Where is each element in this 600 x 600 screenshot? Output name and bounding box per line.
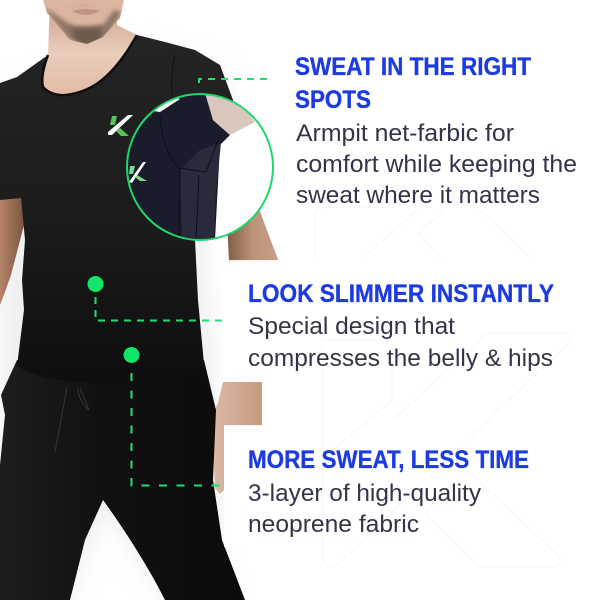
neck skin	[42, 0, 137, 95]
text: armpit description: Armpit net-farbic for	[296, 120, 514, 147]
black pants	[0, 360, 245, 600]
connector: armpit detail	[199, 79, 268, 83]
text: slimmer description: Special design that	[248, 313, 455, 340]
drawstring	[55, 387, 89, 452]
marker dot: belly	[88, 276, 104, 292]
model figure	[0, 0, 279, 600]
face	[43, 0, 124, 46]
text: fabric description	[248, 480, 481, 538]
right arm	[226, 200, 279, 262]
panel: more sweat backing	[224, 425, 600, 547]
background soft shadow	[0, 45, 235, 600]
marker dot: waist	[124, 347, 140, 363]
panel: look slimmer backing	[224, 260, 600, 382]
connector: belly	[96, 297, 224, 320]
text: slimmer description	[248, 313, 553, 372]
watermark K logo	[315, 207, 570, 567]
dark sleeve and torso	[128, 95, 230, 238]
heading: sweat in the right spots	[295, 53, 531, 114]
white strip	[154, 98, 180, 112]
text: armpit description: comfort while keeping the	[296, 151, 577, 178]
text: armpit description	[296, 120, 577, 209]
mesh panel	[180, 143, 221, 240]
heading: more sweat less time: MORE SWEAT, LESS TIME	[248, 446, 529, 474]
text: slimmer description: compresses the belly & hips	[248, 345, 553, 372]
heading: look slimmer instantly: LOOK SLIMMER INSTANTLY	[248, 280, 554, 308]
logo K in lens	[129, 162, 147, 183]
bare arm	[205, 93, 255, 135]
text: armpit description: sweat where it matters	[296, 182, 540, 209]
armpit zoom circle	[120, 90, 273, 245]
forearm and hand	[202, 382, 262, 494]
black shirt	[0, 35, 235, 383]
left arm	[0, 198, 24, 305]
connector: waist	[132, 373, 224, 486]
shirt collar	[42, 35, 137, 95]
text: fabric description: neoprene fabric	[248, 511, 419, 538]
heading: sweat in the right spots: SPOTS	[295, 86, 371, 114]
heading: sweat in the right spots: SWEAT IN THE RIGHT	[295, 53, 531, 81]
text: fabric description: 3-layer of high-quality	[248, 480, 481, 507]
logo K on chest	[108, 115, 133, 136]
